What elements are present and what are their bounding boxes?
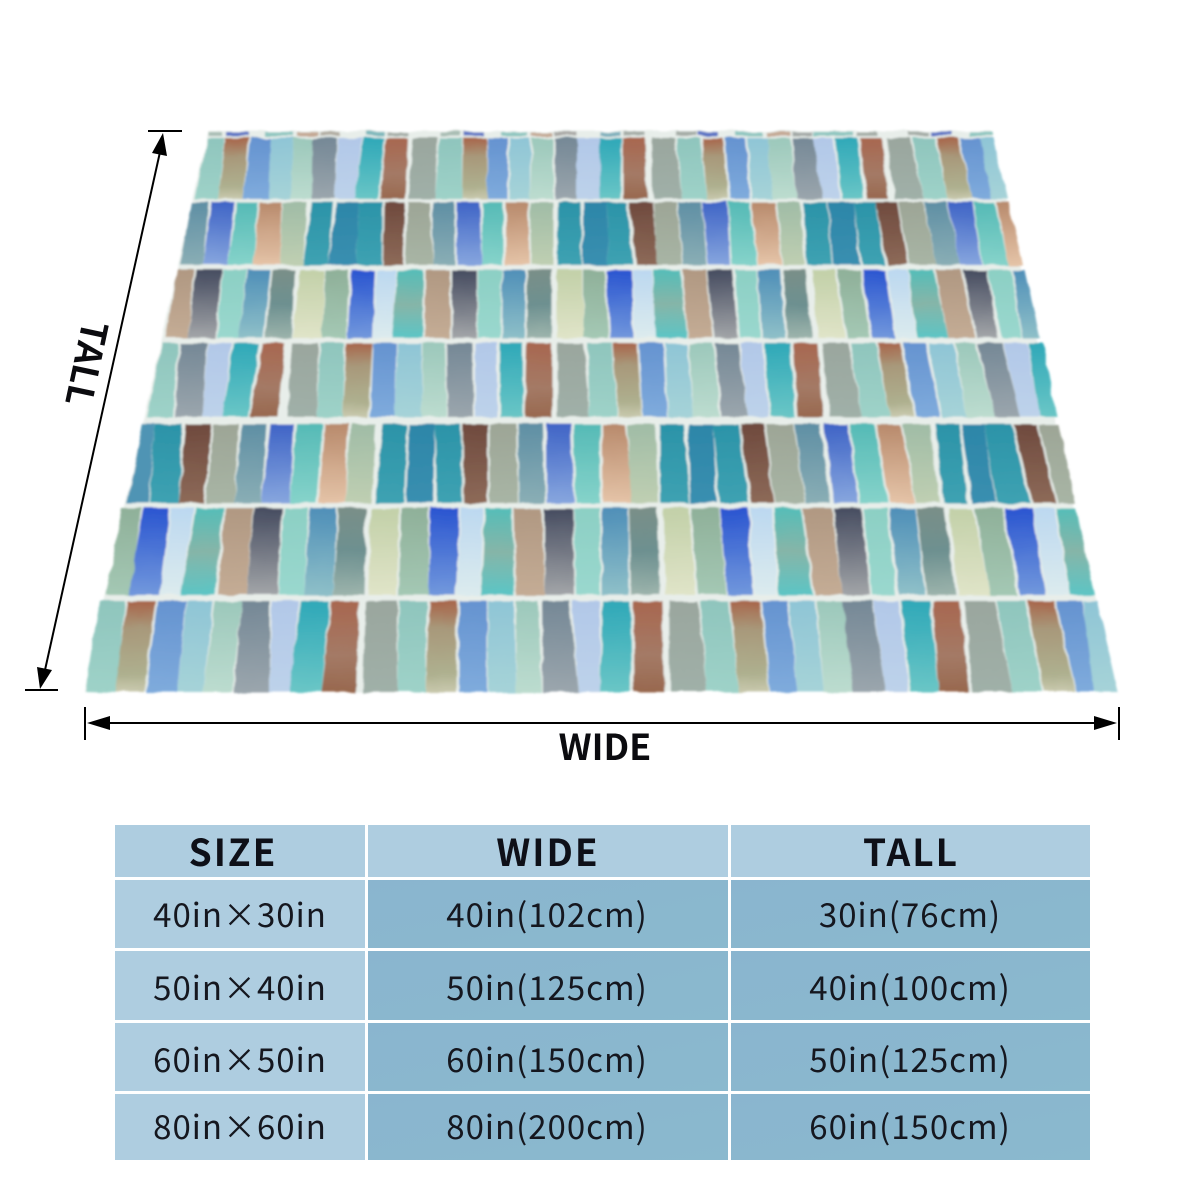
top edge strip [208, 132, 992, 136]
table header: SIZE [189, 823, 277, 877]
row 5 strips [127, 424, 1076, 503]
tall label: TALL [54, 317, 123, 411]
blanket [84, 131, 1118, 692]
row 2 strips [180, 202, 1023, 265]
table row 50x40 [115, 951, 1090, 1020]
table row 80x60: 80in(200cm) [446, 1101, 648, 1149]
table header: WIDE [496, 823, 600, 877]
wide dimension arrow [85, 707, 1119, 740]
table row 60x50: 60in(150cm) [446, 1034, 648, 1082]
table row 40x30: 30in(76cm) [819, 889, 1001, 937]
row 3 strips [166, 270, 1040, 338]
table row 80x60 [115, 1094, 1090, 1160]
table row 60x50 [115, 1023, 1090, 1091]
table row 80x60: 60in(150cm) [809, 1101, 1011, 1149]
row 6 strips [106, 508, 1095, 595]
row 1 strips [195, 138, 1007, 199]
table row 40x30: 40in×30in [153, 889, 327, 937]
table row 80x60: 80in×60in [153, 1101, 327, 1149]
row 4 strips [147, 343, 1057, 417]
table row 40x30: 40in(102cm) [446, 889, 648, 937]
table row 50x40: 50in×40in [153, 962, 327, 1010]
table row 50x40: 50in(125cm) [446, 962, 648, 1010]
tall dimension arrow [25, 131, 182, 690]
table header [115, 823, 1090, 877]
table row 60x50: 60in×50in [153, 1034, 327, 1082]
table row 40x30 [115, 880, 1090, 948]
table row 60x50: 50in(125cm) [809, 1034, 1011, 1082]
row 7 strips [85, 601, 1118, 692]
table row 50x40: 40in(100cm) [809, 962, 1011, 1010]
wide label: WIDE [559, 719, 651, 771]
table header: TALL [863, 823, 959, 877]
size table [115, 823, 1090, 1160]
